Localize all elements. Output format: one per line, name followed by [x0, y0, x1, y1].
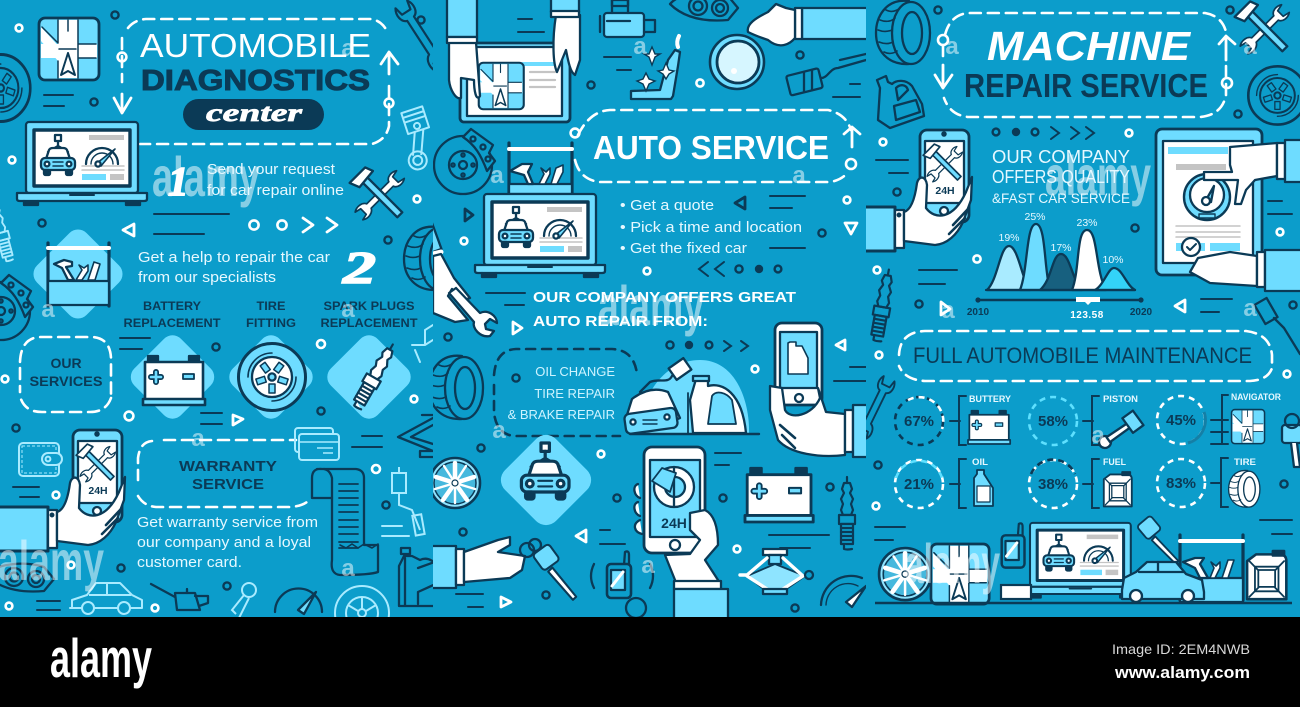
- chart: distribution peaks: [986, 211, 1135, 290]
- frame: auto service: [575, 110, 860, 182]
- warranty text: [138, 516, 317, 567]
- bullet list: • Get a quote: [620, 197, 714, 214]
- watermark a marks: a: [1243, 295, 1257, 322]
- title: repair service: REPAIR SERVICE: [964, 67, 1208, 104]
- icon: credit cards: [295, 428, 339, 460]
- title: auto service: AUTO SERVICE: [593, 129, 829, 166]
- icon: hand with wrench: [419, 217, 497, 336]
- icon: plug connector: [392, 467, 425, 536]
- decorative dots and dashes: [2, 11, 425, 611]
- icon: spark plug outline: [0, 209, 14, 262]
- watermark alamy bottom: alamy: [905, 532, 1000, 595]
- icon: brake disc: [434, 129, 495, 194]
- watermark a marks: a: [341, 555, 355, 582]
- watermark a marks: a: [641, 552, 655, 579]
- icon: wallet: [19, 443, 62, 476]
- icon: engine: [600, 0, 655, 37]
- watermark alamy: alamy: [1045, 144, 1151, 207]
- phone label 24H: 24H: [661, 515, 687, 531]
- watermark a marks: a: [1243, 33, 1257, 60]
- step 1 text: Send your request: [207, 161, 336, 178]
- warranty text: Get warranty service from: [137, 514, 318, 531]
- watermark a marks: a: [341, 296, 355, 323]
- metric: fuel 38%: 38%: [1038, 476, 1068, 493]
- watermark a marks: a: [633, 33, 647, 60]
- frame: warranty service: [138, 440, 309, 507]
- watermark a marks: a: [492, 417, 506, 444]
- label: battery replacement: BATTERY: [143, 299, 201, 313]
- title: automobile: AUTOMOBILE: [140, 28, 371, 65]
- chart: distribution peaks: 10%: [1102, 254, 1124, 266]
- metric: oil 21%: [895, 457, 993, 508]
- company text: [992, 147, 1130, 206]
- watermark a marks: a: [490, 162, 504, 189]
- company text: OFFERS QUALITY: [992, 167, 1130, 187]
- frame: full automobile maintenance: [899, 331, 1272, 381]
- metric: piston 58%: 58%: [1038, 413, 1068, 430]
- metric: piston 58%: PISTON: [1103, 394, 1138, 405]
- label: spark plugs replacement: SPARK PLUGS: [324, 299, 414, 313]
- icon: hammer and wrench: [1235, 0, 1293, 58]
- frame: warranty service: WARRANTY: [179, 458, 277, 475]
- step 2 text: Get a help to repair the car: [138, 249, 330, 266]
- bullet list: [620, 197, 802, 257]
- icon: phone in hand: [843, 130, 972, 251]
- icon: car seat: [631, 36, 680, 99]
- watermark a marks: a: [792, 162, 806, 189]
- metric: tire 83%: 83%: [1166, 475, 1196, 492]
- icon: headlight: [0, 564, 54, 591]
- chart: distribution peaks: 19%: [998, 232, 1020, 244]
- badge: center: [183, 99, 324, 130]
- label: battery replacement: REPLACEMENT: [124, 316, 221, 330]
- decorative dots and dashes: [873, 6, 1297, 540]
- label: battery replacement: [124, 302, 220, 327]
- panel: auto service: [419, 0, 873, 621]
- metric: navigator 45%: [1157, 392, 1281, 444]
- heading: company offers: [533, 289, 796, 330]
- footer bar: [0, 617, 1300, 707]
- bullet list: • Get the fixed car: [620, 240, 747, 257]
- icon: battery on diamond: [130, 335, 214, 419]
- metric: battery 67%: BUTTERY: [969, 394, 1012, 405]
- step 2 number: 2: [342, 242, 376, 293]
- icon: paint sprayer: [412, 325, 433, 362]
- dashed title frame: [114, 19, 398, 144]
- chart axis: 2010: [967, 307, 990, 318]
- metric: piston 58%: [1029, 394, 1143, 453]
- frame: warranty service: SERVICE: [192, 476, 264, 493]
- icon: key fob at edge: [1282, 414, 1300, 467]
- metric: oil 21%: 21%: [904, 476, 934, 493]
- icon: laptop: [475, 194, 605, 277]
- icon: spark plug: [868, 268, 897, 342]
- title: machine: MACHINE: [987, 23, 1192, 69]
- heading: full automobile maintenance: FULL AUTOMOBILE MAINTENANCE: [913, 343, 1252, 368]
- icon: map navigator: [39, 18, 99, 80]
- frame: repair list: [494, 349, 637, 436]
- frame: our services: SERVICES: [30, 373, 102, 389]
- watermark a marks: [490, 33, 806, 579]
- watermark a marks: a: [945, 33, 959, 60]
- icon: wrench: [394, 0, 433, 70]
- illustration: oil change: [624, 358, 759, 434]
- warranty text: customer card.: [137, 554, 242, 571]
- chart axis: 123.58: [1070, 310, 1104, 321]
- frame: repair list: & BRAKE REPAIR: [508, 407, 615, 422]
- watermark a marks: a: [191, 425, 205, 452]
- metric: navigator 45%: NAVIGATOR: [1231, 392, 1281, 403]
- icon: hand with keys: [430, 537, 576, 604]
- step 1 text: for car repair online: [207, 182, 344, 199]
- icon: car remote: [591, 551, 653, 618]
- warranty text: our company and a loyal: [137, 534, 311, 551]
- icon: oil jug: [399, 548, 440, 606]
- label: spark plugs replacement: [321, 302, 418, 327]
- phone label 24H: 24H: [88, 485, 108, 497]
- title: diagnostics: DIAGNOSTICS: [141, 65, 370, 97]
- company text: OUR COMPANY: [992, 147, 1130, 167]
- frame: our services: [20, 337, 111, 412]
- heading: company offers: OUR COMPANY OFFERS GREAT: [533, 289, 796, 306]
- step 1 number: 1: [168, 158, 188, 204]
- icon: tablet with hands and gauge: [1156, 129, 1300, 291]
- icon: wheel outline: [335, 586, 389, 640]
- toolbox with diamond: [34, 230, 122, 318]
- icon: spark plug on diamond: [327, 335, 411, 419]
- bullet list: • Pick a time and location: [620, 219, 802, 236]
- icon: oil can: [151, 584, 208, 610]
- label: tire fitting: FITTING: [246, 316, 296, 330]
- chart axis: 2020: [1130, 307, 1153, 318]
- icon: jack: [740, 549, 813, 594]
- phone label 24H: 24H: [935, 185, 955, 197]
- frame: our services: OUR: [50, 355, 82, 371]
- watermark a marks: a: [41, 296, 55, 323]
- metric: tire 83%: TIRE: [1234, 457, 1256, 468]
- icon: muffler: [786, 54, 866, 96]
- badge: center: center: [206, 100, 302, 127]
- icon: battery: [745, 468, 813, 522]
- metric: fuel 38%: FUEL: [1103, 457, 1126, 468]
- footer bar: www.alamy.com: [1114, 663, 1250, 682]
- icon: wrench: [854, 375, 896, 440]
- label: spark plugs replacement: REPLACEMENT: [320, 316, 418, 330]
- metric: battery 67%: [895, 394, 1012, 445]
- chart: distribution peaks: 25%: [1024, 211, 1046, 223]
- chart: distribution peaks: 17%: [1050, 242, 1072, 254]
- bottom illustration row: [875, 512, 1292, 604]
- chart axis: [967, 297, 1153, 321]
- step 1 text: [207, 161, 344, 199]
- icon: phone in hand: [0, 430, 125, 551]
- panel: automobile diagnostics center: [0, 0, 458, 640]
- metric: fuel 38%: [1029, 457, 1132, 508]
- icon: gauge: [275, 588, 322, 614]
- icon: phone with brake in hand: [634, 447, 728, 621]
- icon: plug connector: [1254, 298, 1300, 354]
- icon: headlight: [670, 0, 738, 20]
- icon: wheel on diamond: [229, 335, 313, 419]
- watermark a marks: a: [341, 35, 355, 62]
- step 2 text: [138, 249, 330, 286]
- icon: wheel: [0, 54, 30, 122]
- watermark a marks: a: [1091, 422, 1105, 449]
- chart: distribution peaks: 23%: [1076, 217, 1098, 229]
- icon: key outline: [232, 583, 256, 618]
- icon: piston: [400, 105, 430, 170]
- icon: hand with magnifier: [710, 4, 872, 89]
- watermark a marks: a: [41, 36, 55, 63]
- icon: wheel: [1248, 66, 1300, 125]
- label: tire fitting: TIRE: [256, 299, 286, 313]
- metric: battery 67%: 67%: [904, 413, 934, 430]
- watermark a marks: [41, 35, 355, 582]
- company text: &FAST CAR SERVICE: [992, 190, 1130, 206]
- icon: spark plug: [839, 477, 855, 550]
- icon: oil jug outline: [877, 76, 924, 128]
- icon: phone with oil in hand: [770, 323, 873, 457]
- icon: tire: [429, 356, 483, 419]
- label: tire fitting: [246, 302, 296, 327]
- metric: oil 21%: OIL: [972, 457, 988, 468]
- icon: receipt: [312, 469, 378, 575]
- heading: company offers: AUTO REPAIR FROM:: [533, 313, 708, 330]
- icon: gauge: [821, 576, 866, 607]
- icon: laptop diagnostics: [17, 122, 147, 205]
- watermark alamy: alamy: [598, 274, 704, 337]
- icon: shine stars: [637, 47, 674, 91]
- frame: repair list: TIRE REPAIR: [534, 386, 615, 401]
- tablet held in hands: [447, 0, 580, 122]
- watermark a marks: a: [941, 297, 955, 324]
- watermark alamy: alamy: [152, 145, 260, 208]
- step 2 text: from our specialists: [138, 269, 276, 286]
- footer bar: Image ID: 2EM4NWB: [1112, 641, 1250, 657]
- watermark alamy bottom: alamy: [0, 529, 104, 592]
- icon: jack: [398, 415, 433, 457]
- icon: brake disc: [0, 275, 33, 340]
- panel: machine repair service: [843, 0, 1300, 604]
- icon: tire: [402, 226, 433, 292]
- icon: toolbox: [509, 143, 572, 200]
- icon: car on diamond: [495, 429, 597, 531]
- decorative dots and dashes: [444, 19, 866, 612]
- icon: rim: [430, 458, 480, 508]
- icon: hammer and wrench: [350, 165, 408, 224]
- frame: repair list: OIL CHANGE: [535, 364, 615, 379]
- metric: navigator 45%: 45%: [1166, 412, 1196, 429]
- metric: tire 83%: [1157, 457, 1260, 507]
- footer bar: alamy: [50, 627, 152, 689]
- watermark a marks: [941, 33, 1257, 449]
- icon: car outline: [70, 583, 142, 614]
- dashed title frame: [935, 13, 1235, 117]
- icon: tire: [876, 1, 930, 64]
